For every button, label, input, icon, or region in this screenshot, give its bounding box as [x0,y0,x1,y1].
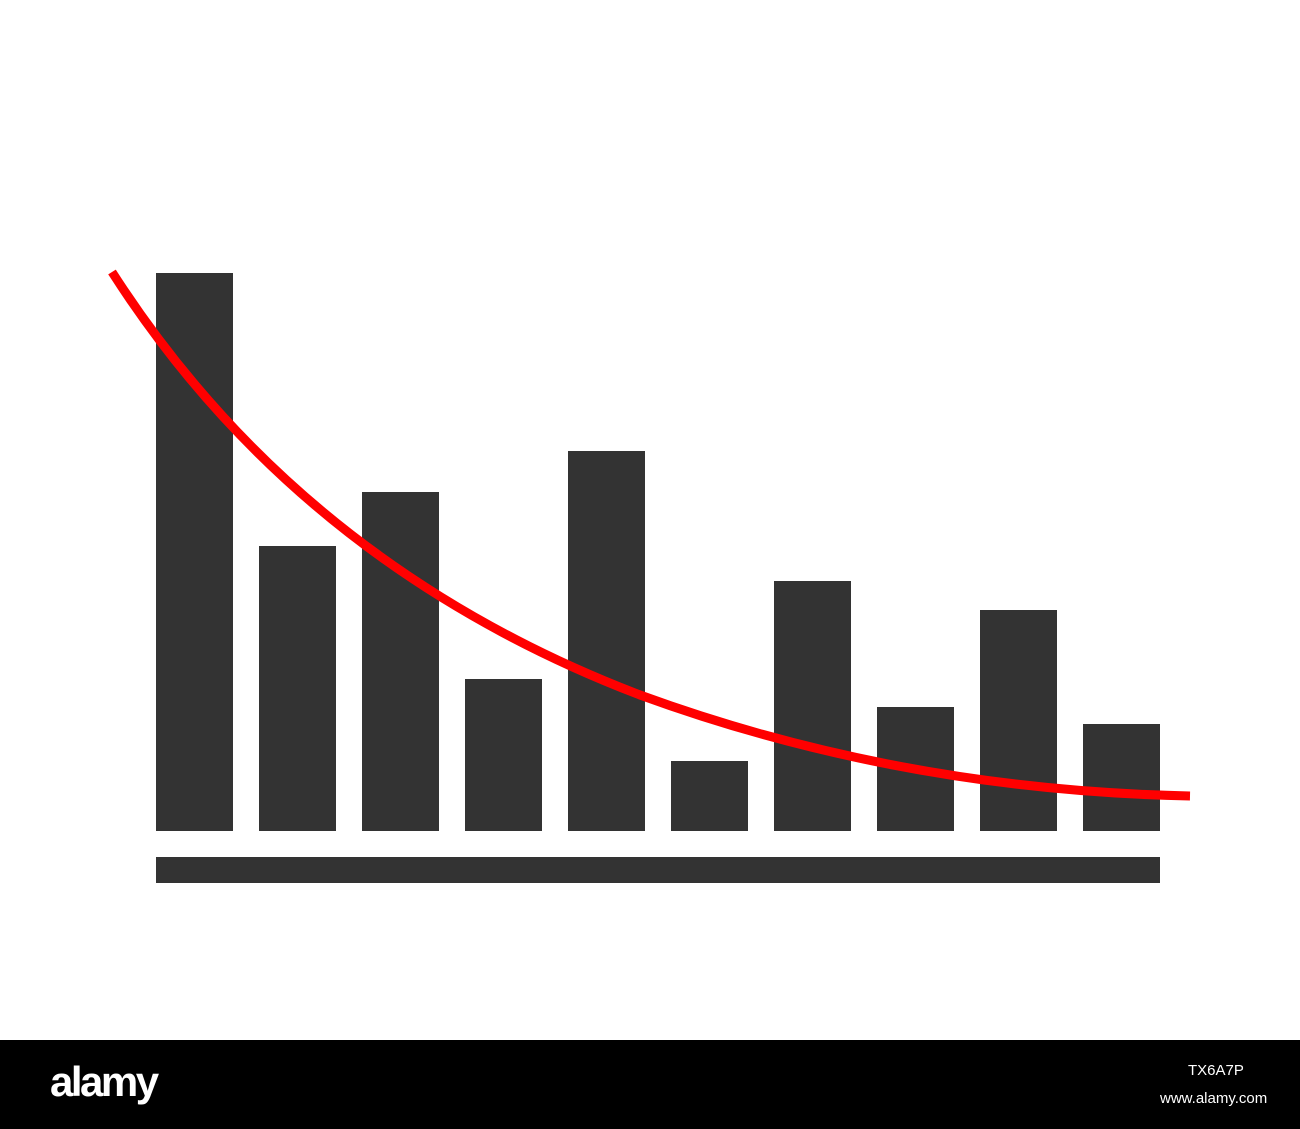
baseline bar [156,857,1160,883]
image id: TX6A7P [1188,1062,1244,1079]
logo text: alamy [50,1058,157,1105]
red trend line [112,272,1190,796]
bars [156,273,1160,831]
website: www.alamy.com [1160,1090,1267,1107]
footer banner [0,1040,1300,1129]
